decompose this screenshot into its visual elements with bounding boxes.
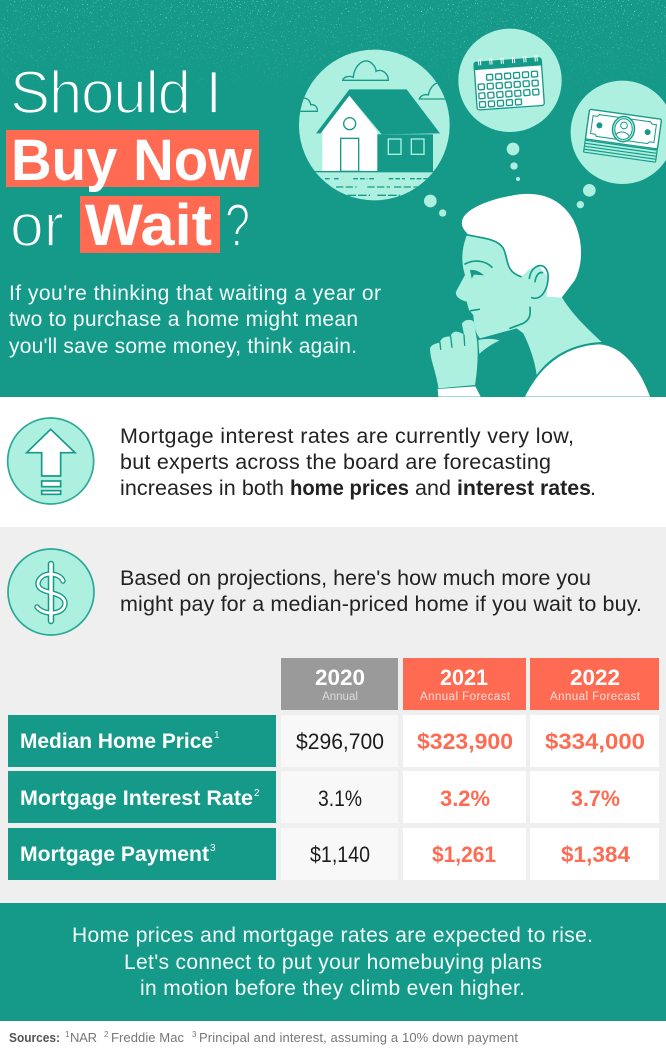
text: forecast note: increases in both	[120, 476, 284, 500]
title: Buy Now	[11, 128, 253, 193]
text: projections intro: Based on projections, here's how much more you	[120, 566, 591, 590]
sources footnote: 3	[192, 1030, 197, 1039]
shirt	[525, 344, 650, 397]
illustration: thought bubbles and thinking man	[297, 29, 666, 397]
panel: interest rates note	[0, 397, 666, 527]
intro text: two to purchase a home might mean	[9, 308, 358, 331]
text: forecast note: .	[590, 476, 596, 500]
table header: 2021: 2021	[440, 665, 488, 690]
icon: calendar bubble	[458, 29, 562, 132]
sources footnote: 2	[104, 1030, 109, 1039]
hair	[462, 194, 581, 298]
text: forecast note	[120, 424, 596, 500]
panel: projections background	[0, 527, 666, 903]
table header: 2020: 2020	[315, 665, 365, 690]
row: mortgage payment: $1,140	[310, 842, 370, 867]
title: Wait	[85, 193, 212, 258]
icon: money bubble dots	[577, 184, 596, 208]
row: mortgage interest rate	[8, 771, 659, 823]
icon: up arrow	[8, 418, 94, 504]
panel: call to action: Home prices and mortgage rates are expected to rise.	[72, 924, 593, 947]
text: forecast note: home prices	[290, 476, 409, 500]
icon: calendar bubble dots	[507, 143, 520, 181]
row: median home price: Median Home Price	[20, 730, 213, 753]
table: price forecast	[8, 658, 659, 880]
row: mortgage interest rate: Mortgage Interest Rate	[20, 787, 253, 810]
title: ?	[225, 192, 250, 259]
eye	[470, 270, 484, 279]
sources footnote: NAR	[70, 1030, 97, 1045]
table header: 2020	[281, 658, 398, 710]
title	[6, 59, 259, 259]
table header: 2022: 2022	[570, 665, 620, 690]
title: Should I	[10, 59, 222, 126]
sources footnote: 1	[65, 1030, 70, 1039]
table header: 2021: Annual Forecast	[420, 691, 511, 703]
row: mortgage interest rate: 2	[254, 788, 260, 799]
table header: 2021	[403, 658, 526, 710]
figure: thinking man	[430, 194, 650, 397]
sources footnote: Sources:	[9, 1030, 60, 1045]
row: mortgage interest rate: 3.7%	[571, 786, 620, 811]
intro text: you'll save some money, think again.	[9, 335, 357, 358]
row: mortgage interest rate: 3.1%	[318, 786, 362, 811]
hand	[430, 320, 478, 388]
cuff	[438, 386, 481, 397]
row: median home price: $334,000	[545, 729, 645, 754]
row: mortgage payment: Mortgage Payment	[20, 843, 209, 866]
icon: dollar sign	[8, 549, 94, 635]
row: mortgage payment: 3	[210, 843, 216, 854]
row: mortgage payment	[8, 828, 659, 880]
row: median home price	[8, 715, 659, 767]
text: projections intro	[120, 566, 642, 616]
panel: call to action: in motion before they climb even higher.	[140, 977, 525, 1000]
row: median home price: 1	[214, 730, 220, 741]
row: mortgage payment: $1,261	[432, 842, 496, 867]
panel: header background	[0, 0, 666, 397]
row: median home price: $296,700	[296, 729, 384, 754]
table header: 2022	[530, 658, 659, 710]
panel: call to action	[0, 903, 666, 1021]
row: median home price: $323,900	[417, 729, 513, 754]
table header: 2022: Annual Forecast	[550, 691, 641, 703]
text: projections intro: might pay for a median-priced home if you wait to buy.	[120, 592, 642, 616]
neck and face	[456, 230, 602, 375]
row: mortgage payment: $1,384	[561, 842, 631, 867]
text: forecast note: Mortgage interest rates are currently very low,	[120, 424, 574, 448]
thumb	[478, 339, 499, 354]
icon: house bubble	[297, 50, 453, 200]
text: forecast note: interest rates	[457, 476, 591, 500]
row: mortgage interest rate: 3.2%	[440, 786, 490, 811]
hairline, ear and facial lines	[465, 235, 548, 328]
title: or	[10, 192, 64, 259]
panel: call to action: Let's connect to put your homebuying plans	[124, 951, 542, 974]
sources footnote	[9, 1030, 518, 1045]
icon: house bubble dots	[424, 195, 446, 217]
sources footnote: Principal and interest, assuming a 10% down payment	[199, 1030, 518, 1045]
intro text	[9, 282, 381, 358]
text: forecast note: but experts across the board are forecasting	[120, 450, 551, 474]
table header: 2020: Annual	[322, 691, 358, 703]
icon: money bubble	[571, 81, 666, 184]
text: forecast note: and	[415, 476, 451, 500]
sources footnote: Freddie Mac	[111, 1030, 184, 1045]
intro text: If you're thinking that waiting a year or	[9, 282, 381, 305]
